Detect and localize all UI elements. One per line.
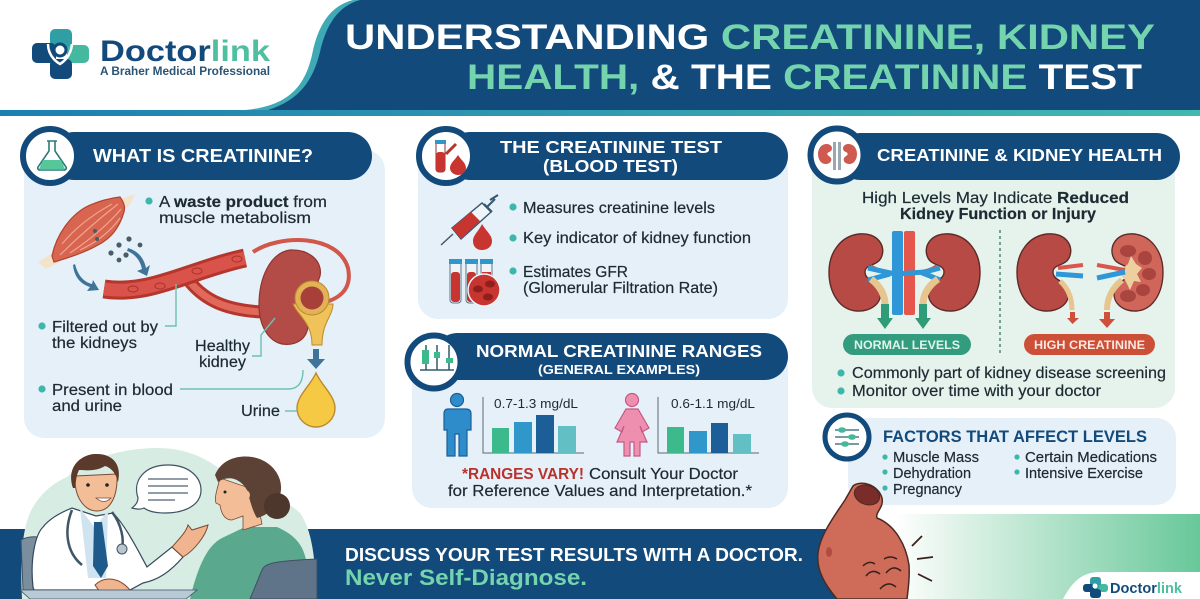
- panel background: [418, 150, 788, 319]
- arrow: kidney to urine: [307, 349, 325, 369]
- desk: [20, 590, 197, 599]
- bullet: waste product: muscle metabolism: [159, 210, 311, 227]
- bullet: filtered: the kidneys: [52, 335, 137, 352]
- bullet list: Monitor over time with your doctor: [852, 383, 1101, 400]
- icon: test tubes and cells: [449, 259, 500, 306]
- logo: Doctorlink: [32, 29, 270, 79]
- illustration: healthy kidney: [259, 250, 333, 345]
- bullet: waste product: [145, 194, 327, 227]
- bullet: present: and urine: [52, 398, 122, 415]
- icon: male figure: [444, 394, 471, 456]
- heading pill: [408, 333, 788, 388]
- note: ranges vary: Consult Your Doctor: [589, 466, 738, 483]
- illustration: high creatinine kidneys: [1017, 234, 1163, 328]
- wordmark: Doctor link: [100, 35, 270, 68]
- bullet: filtered: Filtered out by: [52, 319, 158, 336]
- header band: [0, 0, 1200, 116]
- heading: FACTORS THAT AFFECT LEVELS: [883, 428, 1147, 446]
- panel background: [412, 350, 788, 508]
- illustration: normal kidneys: [829, 231, 980, 329]
- pain marks: [912, 536, 933, 581]
- illustration: worried kidney character: [818, 482, 933, 599]
- illustration: blood vessel: [104, 240, 349, 312]
- badge: high creatinine: [1024, 334, 1155, 355]
- chart: male range: [483, 396, 584, 453]
- icon: blood drop: [473, 224, 492, 250]
- heading pill: [23, 129, 372, 183]
- badge: high creatinine: HIGH CREATININE: [1034, 338, 1145, 352]
- heading pill: [810, 128, 1180, 182]
- note: ranges vary: [448, 466, 752, 500]
- bullet list: [837, 365, 1166, 400]
- panel: what is creatinine: [23, 129, 385, 438]
- panel: the creatinine test: [418, 129, 788, 319]
- illustration: muscle: [38, 194, 135, 269]
- leader lines: [165, 284, 303, 411]
- badge: normal levels: NORMAL LEVELS: [854, 338, 960, 352]
- bullet list: (Glomerular Filtration Rate): [523, 280, 718, 297]
- chart: female range: 0.6-1.1 mg/dL: [671, 396, 755, 411]
- bullet: present: [38, 382, 173, 415]
- panel background: [848, 418, 1176, 505]
- label: healthy kidney: Healthy: [195, 338, 250, 355]
- subheading: High Levels May Indicate Reduced: [862, 190, 1129, 207]
- panel: normal creatinine ranges: [408, 333, 788, 508]
- label: healthy kidney: [195, 338, 250, 371]
- divider: dashed: [999, 230, 1001, 353]
- panel: factors that affect levels: [825, 415, 1176, 505]
- icon: syringe: [441, 195, 498, 245]
- bullet: filtered: [38, 319, 158, 352]
- panel background: [24, 150, 385, 438]
- heading pill: (GENERAL EXAMPLES): [538, 362, 700, 377]
- chart: male range: 0.7-1.3 mg/dL: [494, 396, 578, 411]
- footer message: [345, 544, 803, 590]
- title: UNDERSTANDING CREATININE, KIDNEY: [345, 18, 1155, 57]
- factor list: Intensive Exercise: [1025, 466, 1143, 482]
- patient: [190, 456, 306, 599]
- panel background: [812, 150, 1175, 408]
- bullet list: Commonly part of kidney disease screening: [852, 365, 1166, 382]
- background blob: [21, 448, 316, 599]
- heading pill: CREATININE & KIDNEY HEALTH: [877, 145, 1162, 165]
- chart: female range: [658, 396, 759, 453]
- chair: doctor: [21, 537, 38, 590]
- factor list: [882, 450, 1157, 498]
- icon: medical cross with stethoscope: [32, 29, 89, 79]
- footer logo: [1083, 577, 1183, 598]
- note: ranges vary: for Reference Values and Interpretation.*: [448, 483, 752, 500]
- icon: female figure: [615, 394, 649, 456]
- note: ranges vary: *RANGES VARY!: [462, 466, 584, 483]
- factor list: Pregnancy: [893, 482, 963, 498]
- title: HEALTH, & THE CREATININE TEST: [467, 58, 1142, 97]
- label: healthy kidney: kidney: [199, 354, 246, 371]
- factor list: Dehydration: [893, 466, 971, 482]
- icon: urine drop: [297, 373, 335, 427]
- bullet list: [509, 200, 751, 297]
- heading pill: [419, 129, 788, 183]
- bullet: waste product: A waste product from: [159, 194, 327, 211]
- particles and arrows: [73, 229, 150, 291]
- doctor: [32, 454, 208, 592]
- footer message: Never Self-Diagnose.: [345, 565, 587, 590]
- footer banner: [0, 514, 1200, 599]
- footer message: DISCUSS YOUR TEST RESULTS WITH A DOCTOR.: [345, 544, 803, 565]
- icon: sliders: [825, 415, 869, 459]
- badge: normal levels: [843, 334, 971, 355]
- factor list: Muscle Mass: [893, 450, 979, 466]
- bullet list: Estimates GFR: [523, 264, 628, 281]
- illustration: doctor and patient: [20, 448, 317, 599]
- heading pill: (BLOOD TEST): [543, 156, 678, 176]
- subheading: Kidney Function or Injury: [900, 206, 1096, 223]
- factor list: Certain Medications: [1025, 450, 1157, 466]
- heading pill: NORMAL CREATININE RANGES: [476, 341, 762, 361]
- footer logo: Doctorlink: [1110, 580, 1183, 597]
- tagline: A Braher Medical Professional: [100, 66, 270, 78]
- heading pill: THE CREATININE TEST: [500, 137, 722, 157]
- panel: creatinine and kidney health: [810, 128, 1180, 408]
- bullet: present: Present in blood: [52, 382, 173, 399]
- bullet list: Key indicator of kidney function: [523, 230, 751, 247]
- speech bubble: [132, 465, 201, 513]
- chair: patient: [250, 559, 317, 599]
- title: [345, 18, 1155, 97]
- label: urine: Urine: [241, 403, 280, 420]
- subheading: [862, 190, 1129, 223]
- heading pill: WHAT IS CREATININE?: [93, 145, 313, 166]
- bullet list: Measures creatinine levels: [523, 200, 715, 217]
